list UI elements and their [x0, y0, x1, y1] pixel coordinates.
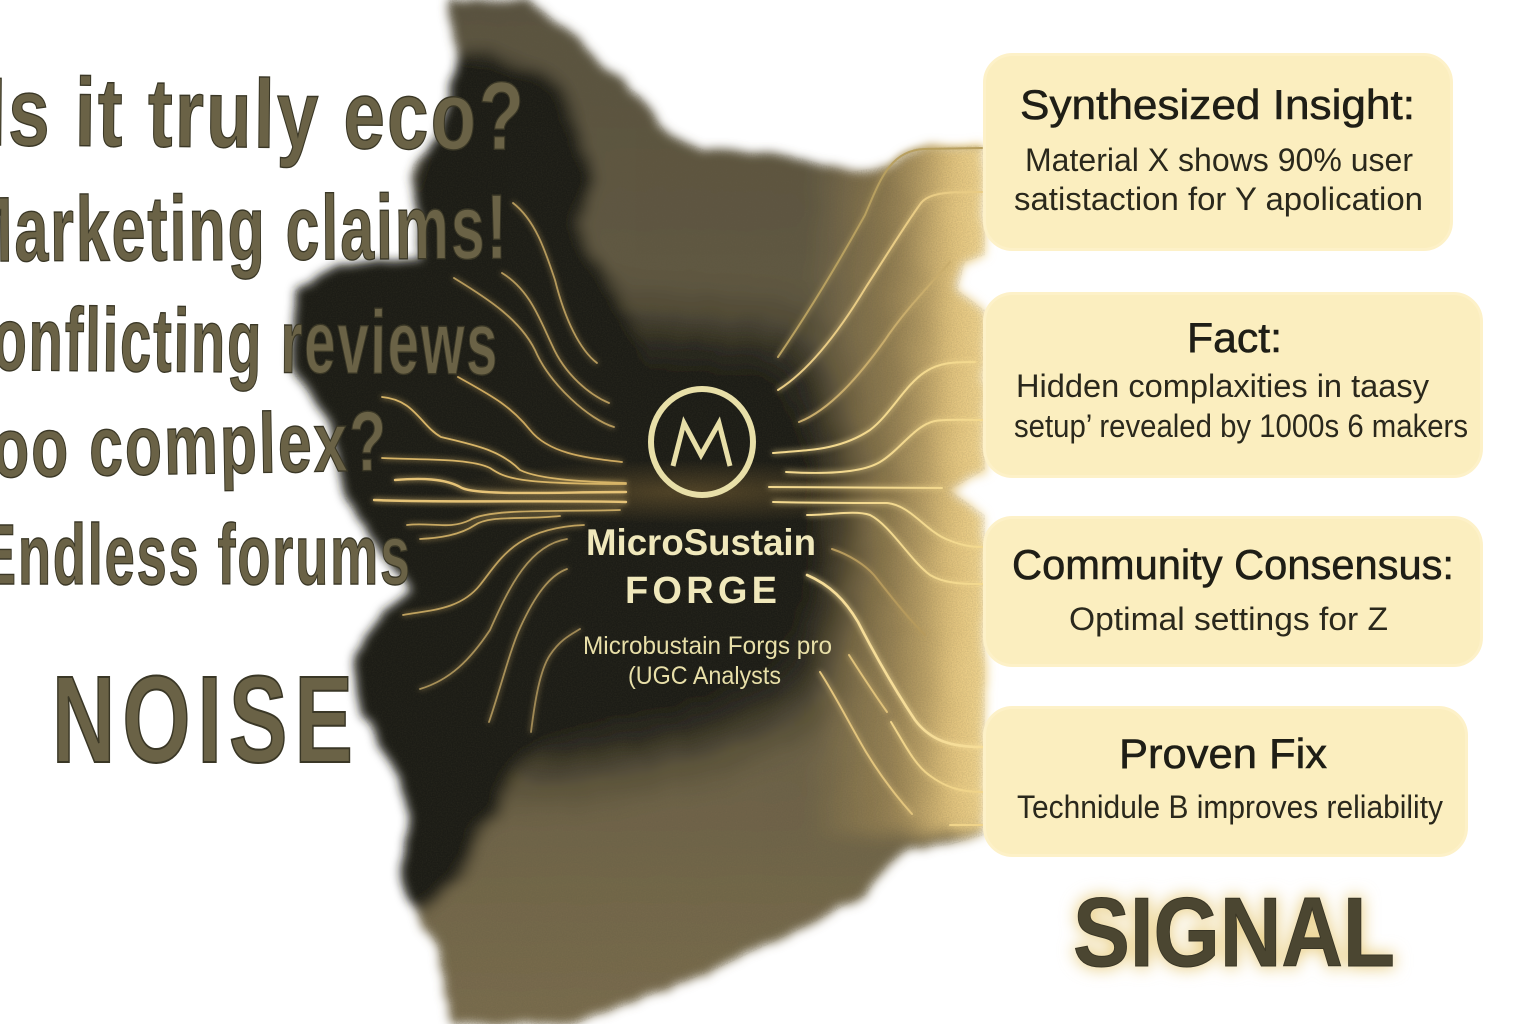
- ink blot background: [260, 0, 1005, 1024]
- right output traces: [769, 148, 982, 825]
- signal label: SIGNAL: [1073, 877, 1395, 987]
- brand name: MicroSustain: [586, 522, 816, 563]
- signal label: SIGNAL: [1073, 877, 1395, 987]
- card shape: [984, 708, 1466, 856]
- noise line: endless forums: Endless forums: [0, 508, 412, 603]
- card shape: [984, 294, 1482, 476]
- brand subtitle: Microbustain Forgs pro: [583, 632, 832, 660]
- panel: synthesized insight: [984, 54, 1452, 250]
- left input traces: [374, 203, 626, 732]
- card shape: [984, 518, 1482, 666]
- panel: fact: [984, 294, 1482, 476]
- card body: Optimal settings for Z: [1069, 601, 1388, 637]
- card heading: Proven Fix: [1119, 730, 1327, 777]
- brand word: forge: FORGE: [625, 570, 777, 612]
- icon: M logo: [651, 389, 753, 495]
- noise label: NOISE: [52, 652, 360, 789]
- card heading: Synthesized Insight:: [1020, 81, 1415, 128]
- panel: proven fix: [984, 708, 1466, 856]
- center brand block: [583, 389, 832, 690]
- card body: Material X shows 90% user: [1025, 142, 1413, 178]
- card shape: [984, 54, 1452, 250]
- brand subtitle line two: (UGC Analysts: [628, 662, 781, 690]
- noise text block: [0, 57, 527, 789]
- card body: Hidden complaxities in taasy: [1016, 368, 1429, 404]
- card body line two: satistaction for Y apolication: [1014, 181, 1423, 217]
- card heading: Community Consensus:: [1012, 541, 1454, 588]
- card body: Technidule B improves reliability: [1017, 789, 1443, 825]
- noise line: is it truly eco: Is it truly eco?: [0, 57, 527, 171]
- card heading: Fact:: [1187, 314, 1282, 361]
- panel: community consensus: [984, 518, 1482, 666]
- card body line two: setup’ revealed by 1000s 6 makers: [1014, 408, 1468, 444]
